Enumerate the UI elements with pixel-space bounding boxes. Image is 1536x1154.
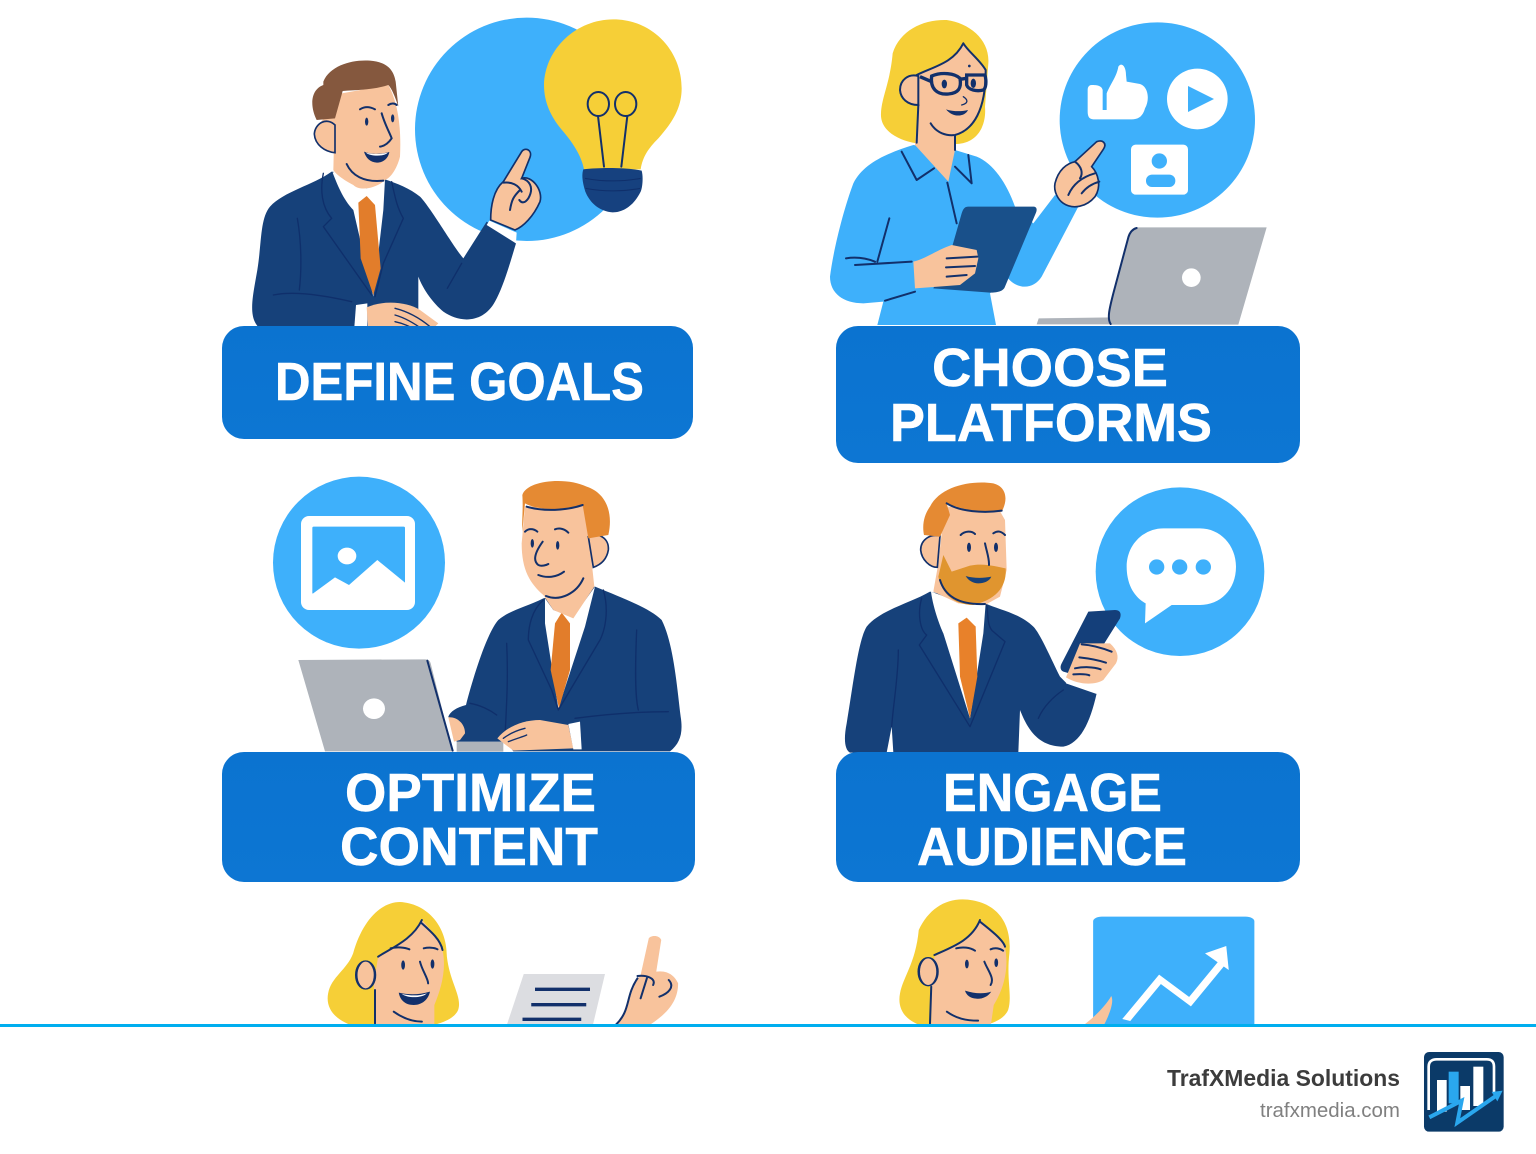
man: shirt: [333, 167, 385, 297]
icon: image in circle: [273, 477, 445, 649]
man: shirt: [545, 587, 595, 708]
icon: light bulb: [544, 19, 682, 212]
man: suit: [845, 592, 1097, 753]
woman: ear: [900, 75, 918, 105]
woman: hair: [899, 899, 1010, 1027]
woman: collar and blouse lines: [846, 152, 972, 301]
man: phone: [1061, 610, 1121, 676]
icon: profile card: [1131, 145, 1188, 195]
woman: ear: [919, 958, 938, 986]
panel: engage audience: [836, 752, 1300, 882]
man: beard: [938, 555, 1006, 605]
man: suit jacket: [252, 172, 516, 334]
woman: hair: [328, 902, 459, 1027]
man: pointing hand: [491, 149, 541, 230]
laptop: [298, 659, 503, 752]
heading: choose platforms: CHOOSE: [932, 338, 1168, 398]
man: facial features: [525, 505, 583, 598]
woman: face lines: [917, 43, 986, 150]
panel: define goals: [222, 326, 693, 439]
illustration: woman with document: [328, 902, 678, 1027]
man: shirt: [931, 592, 986, 718]
man: hair: [923, 483, 1005, 537]
laptop: [1037, 227, 1267, 325]
man: tie: [958, 618, 977, 718]
man: hand holding phone: [1066, 643, 1118, 684]
illustration: bearded man with phone and chat bubble: [845, 483, 1264, 753]
man: neck and face: [933, 507, 1007, 605]
man: tie: [551, 613, 570, 708]
icon: chat bubble in circle: [1096, 487, 1264, 656]
footer: [0, 1024, 1536, 1154]
panel: optimize content: [222, 752, 695, 882]
woman: hair: [881, 20, 988, 144]
footer: brand name: TrafXMedia Solutions: [1167, 1065, 1400, 1091]
man: lapels and creases: [892, 598, 1063, 727]
man: ear: [314, 121, 335, 153]
man: cuff: [1066, 680, 1097, 694]
woman: facial features: [375, 920, 442, 1023]
man: cuff: [487, 221, 517, 243]
heading: define goals: DEFINE GOALS: [275, 352, 644, 412]
illustration: woman with growth chart: [899, 899, 1254, 1037]
icon: document: [506, 974, 605, 1027]
man: ear: [588, 535, 608, 567]
man: lapels and creases: [470, 590, 668, 737]
icon: play button: [1167, 69, 1228, 129]
man: shirt cuff lower: [354, 303, 367, 332]
heading: engage audience: ENGAGE: [943, 763, 1162, 823]
icon: blue circle: [415, 18, 638, 241]
pointing hand: [616, 936, 678, 1027]
illustration: woman with tablet and social icons: [830, 20, 1267, 325]
woman: tablet: [933, 207, 1037, 293]
man: tie: [358, 196, 381, 295]
woman: glasses: [920, 74, 986, 94]
heading: engage audience: AUDIENCE: [917, 817, 1187, 877]
illustration: businessman with light bulb: [252, 18, 682, 334]
panel: choose platforms: [836, 326, 1300, 463]
man: neck and face: [320, 85, 400, 189]
man: neck and face: [522, 503, 594, 618]
man: facial features: [347, 103, 397, 181]
woman: blouse and arm: [830, 145, 1078, 325]
woman: facial features: [930, 920, 1005, 1023]
heading: optimize content: CONTENT: [340, 817, 598, 877]
woman: hand holding tablet: [913, 245, 978, 288]
man: typing hands: [448, 717, 582, 751]
icon: blue circle: [1060, 22, 1255, 218]
hand at chart: [1084, 996, 1112, 1027]
man: resting hand: [367, 303, 438, 332]
icon: thumbs up: [1088, 65, 1148, 119]
man: hair: [522, 481, 610, 538]
man: ear: [921, 535, 940, 567]
icon: company logo: [1424, 1052, 1504, 1132]
footer: website: trafxmedia.com: [1260, 1100, 1400, 1122]
man: suit: [448, 587, 682, 751]
man: hair: [312, 60, 398, 120]
woman: face: [374, 920, 444, 1027]
icon: chart panel with rising arrow: [1093, 917, 1254, 1037]
woman: ear: [356, 961, 375, 989]
man: facial features: [940, 503, 1005, 604]
heading: choose platforms: PLATFORMS: [890, 393, 1212, 453]
woman: face and neck: [910, 43, 986, 182]
man: lapels and suit creases: [273, 173, 462, 302]
illustration: businessman at laptop with image icon: [273, 477, 682, 752]
heading: optimize content: OPTIMIZE: [345, 763, 596, 823]
woman: face: [931, 920, 1006, 1027]
woman: pointing hand: [1055, 141, 1105, 207]
